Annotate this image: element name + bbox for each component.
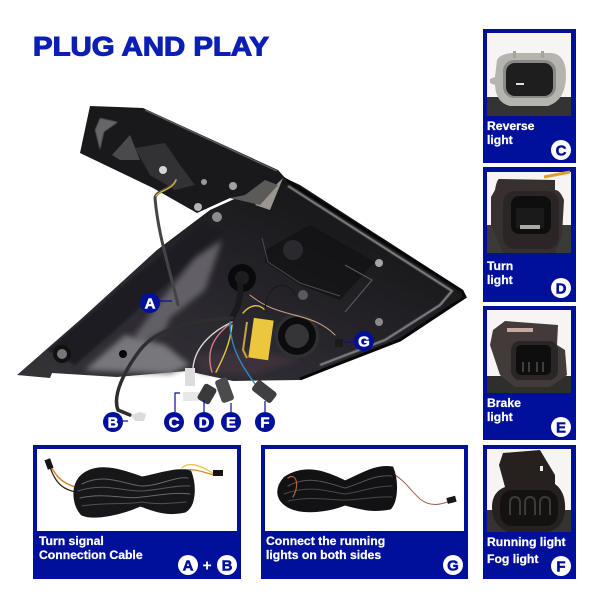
- panel: turn signal connection cable: B: [222, 558, 233, 574]
- panel: turn signal connection cable: +: [202, 558, 212, 574]
- load resistor: [243, 318, 274, 360]
- panel: turn light D: light: [487, 273, 513, 287]
- connector photo F: [492, 450, 565, 532]
- connectors: [131, 339, 343, 421]
- connector photo C: [490, 51, 566, 106]
- panel: turn light D: Turn: [487, 259, 513, 273]
- lens socket: [275, 314, 319, 358]
- callout F: [255, 401, 275, 432]
- callout A: A: [145, 296, 156, 312]
- panel: running and fog light F: [483, 445, 576, 579]
- callout C: C: [169, 414, 180, 432]
- callout F: F: [260, 414, 270, 432]
- panel: reverse light C: Reverse: [487, 119, 535, 133]
- panel: turn light D: D: [556, 280, 567, 298]
- panel: running and fog light F: F: [556, 558, 566, 576]
- panel: turn signal connection cable: [33, 445, 241, 579]
- panel: running lights connection cable: G: [447, 558, 459, 574]
- upper lamp body: [80, 106, 287, 213]
- callout B: [103, 412, 128, 432]
- panel: running and fog light F: Running light: [487, 535, 566, 549]
- panel: brake light E: light: [487, 410, 513, 424]
- panel: brake light E: [483, 306, 576, 440]
- panel: turn light D: [483, 167, 576, 302]
- panel: running lights connection cable: [261, 445, 468, 579]
- panel: turn signal connection cable: Connection Cable: [39, 548, 143, 562]
- callout E: [221, 403, 241, 432]
- panel: reverse light C: [483, 29, 576, 163]
- panel: running lights connection cable: lights on both sides: [266, 548, 381, 562]
- taillight assembly photo: [17, 106, 466, 421]
- callout B: B: [108, 414, 119, 432]
- wiring harness: [117, 180, 335, 415]
- callout G: G: [358, 334, 370, 350]
- panel: turn signal connection cable: Turn signal: [39, 534, 104, 548]
- panel: running and fog light F: Fog light: [487, 552, 538, 566]
- callout G: [345, 331, 374, 351]
- panel: brake light E: E: [556, 420, 566, 436]
- panel: running lights connection cable: Connect the running: [266, 534, 385, 548]
- lower lamp body: [17, 177, 466, 381]
- title: PLUG AND PLAY: [33, 32, 269, 62]
- callout C: [164, 393, 184, 432]
- panel: reverse light C: C: [556, 142, 567, 160]
- panel: brake light E: Brake: [487, 396, 521, 410]
- callout D: [194, 400, 214, 432]
- connector photo D: [491, 172, 570, 253]
- callout E: E: [226, 414, 236, 432]
- panel: turn signal connection cable: A: [183, 558, 194, 574]
- connector photo E: [490, 321, 567, 387]
- callout D: D: [199, 414, 210, 432]
- panel: reverse light C: light: [487, 133, 513, 147]
- callout A: [140, 293, 172, 313]
- cable coil photo G: [279, 467, 457, 511]
- cable coil photo A+B: [44, 458, 223, 516]
